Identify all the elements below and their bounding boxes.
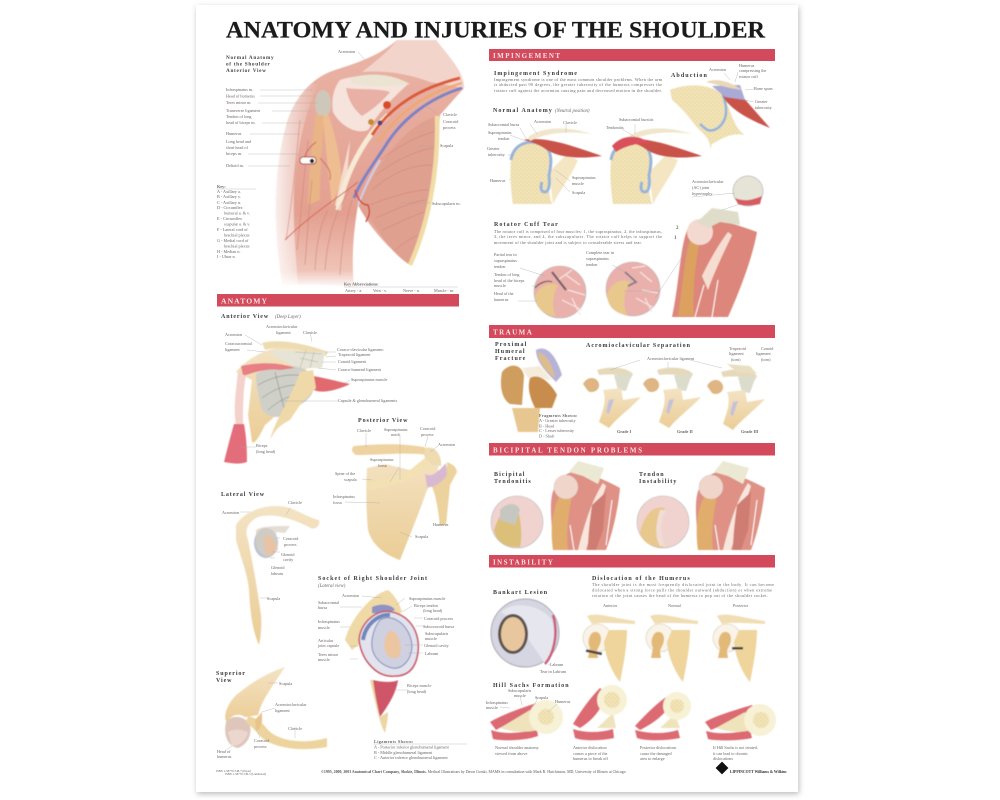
labels: lateral view: Coracoid [283, 536, 299, 541]
labels: normal anatomy: Clavicle [563, 120, 577, 125]
footer credits: ISBN 1-58779-748-7 (Paper) [216, 769, 251, 773]
labels: grades: Trapezoid [729, 346, 747, 351]
panel: tendon instability: Instability [639, 479, 677, 485]
labels: grades: Conoid [761, 346, 774, 351]
labels: normal anatomy: Acromion [534, 119, 552, 124]
labels: posterior view: scapula [344, 477, 357, 482]
labels: main illustration: Infraspinatus m. [226, 87, 253, 92]
labels: normal anatomy: Supraspinatus [572, 175, 596, 180]
panel: normal anatomy: (Neutral position) [555, 109, 590, 114]
labels: rotator cuff: supraspinatus [494, 258, 517, 263]
labels: main illustration: Tendon of long [226, 114, 252, 119]
labels: lateral view [222, 500, 302, 601]
illustration: posterior dislocation [713, 615, 765, 682]
panel: bankart lesion [491, 590, 567, 674]
labels: superior view [217, 681, 307, 759]
labels: socket: muscle [318, 657, 330, 662]
illustration: lateral scapula [236, 506, 319, 645]
panel: dislocation of the humerus: Dislocation of the Humerus [592, 576, 691, 582]
heading band: anatomy [217, 294, 459, 306]
logo [717, 763, 787, 774]
labels: posterior view [333, 426, 456, 539]
key abbreviations: Artery - a. [345, 288, 362, 293]
illustration: shoulder with labelled cuff [672, 176, 763, 317]
labels: anterior deep layer: Acromion [225, 332, 243, 337]
labels: abduction: compressing the [739, 68, 766, 73]
labels: main illustration: Acromion [338, 49, 356, 54]
text: fragments shown: D - Shaft [539, 434, 555, 438]
labels: anterior deep layer: Trapezoid ligament [338, 352, 371, 357]
illustration: tendonitis shoulder [610, 128, 702, 204]
panel: impingement syndrome text: Impingement syndrome is one of the most common shoulder problems. When the arm [494, 77, 663, 82]
captions: hill sachs: dislocations [713, 756, 733, 761]
panel: tendon instability: Tendon [639, 472, 665, 478]
labels: abduction [709, 63, 773, 110]
labels: main illustration: Scapula [440, 143, 453, 148]
panel: rotator cuff tear [494, 176, 763, 318]
labels: socket: Labrum [425, 651, 439, 656]
ligaments shown note: B - Middle glenohumeral ligament [374, 750, 433, 755]
labels: socket: Articular [318, 638, 334, 643]
labels: rotator cuff: Partial tear in [494, 252, 517, 257]
panel: rotator cuff tear: The rotator cuff is comprised of four muscles: 1, the supraspinatus, 2, the infraspinatus, [494, 229, 662, 235]
captions: hill sachs: Normal shoulder anatomy [495, 745, 540, 750]
captions: hill sachs: viewed from above [495, 751, 527, 756]
panel: proximal humeral fracture: Humeral [495, 349, 526, 355]
labels: main illustration: Normal Anatomy [226, 55, 274, 61]
panel: bankart lesion: Bankart Lesion [493, 590, 548, 596]
labels: main illustration: Transverse ligament [226, 108, 261, 113]
labels: anterior deep layer: Supraspinatus muscle [351, 377, 388, 382]
labels: grades: Grade III [741, 429, 759, 434]
panel: abduction [670, 63, 773, 150]
panel: rotator cuff tear: 3, the teres minor, and 4, the subscapularis. The rotator cuff helps to support the [494, 234, 662, 240]
illustration: anterior shoulder muscles [274, 40, 464, 288]
illustration: grades I II III [583, 364, 765, 430]
heading band: impingement: IMPINGEMENT [493, 52, 561, 60]
labels: lateral view: Clavicle [288, 500, 302, 505]
labels: socket: Biceps muscle [407, 683, 431, 688]
heading band: trauma [489, 325, 775, 338]
labels: anterior deep layer: Conoid ligament [338, 359, 367, 364]
panel: rotator cuff tear: Rotator Cuff Tear [494, 222, 559, 228]
key list: B - Axillary v. [217, 194, 241, 199]
labels: grades: ligament [756, 351, 771, 356]
labels: main illustration: of the Shoulder [226, 62, 271, 68]
panel: tendon instability [637, 461, 765, 550]
labels: anterior deep layer: Coraco-humeral ligament [338, 367, 382, 372]
labels: bankart: Labrum [550, 662, 564, 667]
labels: lateral view: labrum [271, 571, 284, 576]
labels: main illustration: Clavicle [443, 112, 457, 117]
labels: grades: Grade II [677, 429, 693, 434]
key list: D - Circumflex [217, 205, 243, 210]
key abbreviations [344, 282, 458, 293]
labels: main illustration: Teres minor m. [226, 100, 251, 105]
panel: dislocation of the humerus: Normal [668, 603, 682, 608]
panel: proximal humeral fracture: Fracture [495, 356, 526, 362]
labels: hill sachs: muscle [486, 705, 498, 710]
heading band: impingement [489, 49, 775, 61]
panel: normal anatomy [487, 108, 702, 204]
labels: main illustration: Coracoid [443, 119, 459, 124]
captions: hill sachs: humerus to break off [573, 756, 609, 761]
illustration: fractured humerus [501, 348, 562, 432]
panel: socket of right shoulder joint: Socket of Right Shoulder Joint [318, 576, 428, 582]
panel: hill sachs formation [486, 683, 776, 761]
footer credits [216, 763, 787, 776]
panel: dislocation of the humerus: rotation of the joint causes the head of the humerus to pop out of the shoulder socket. [592, 593, 768, 598]
panel: lateral view: Lateral View [221, 492, 265, 498]
labels: normal anatomy: tuberosity [488, 152, 506, 157]
labels: main illustration: Humerus [226, 131, 242, 136]
panel: dislocation of the humerus: Anterior [603, 603, 618, 608]
labels: anterior deep layer: (long head) [256, 449, 276, 454]
labels: anterior deep layer: ligament [225, 347, 240, 352]
panel: impingement syndrome text: rotator cuff against the acromion causing pain and decreased motion in the shoulder. [494, 88, 662, 93]
labels: anterior deep layer: Coracoacromial [225, 341, 253, 346]
labels: socket: (long head) [423, 608, 443, 613]
labels: socket: Glenoid cavity [424, 643, 450, 648]
heading band: instability [489, 555, 775, 568]
text: fragments shown: C - Lesser tuberosity [539, 428, 575, 433]
illustration: superior shoulder [225, 667, 327, 749]
captions: hill sachs: cause the damaged [640, 751, 673, 756]
labels: abduction: rotator cuff [739, 74, 758, 79]
labels: lateral view: Acromion [222, 510, 240, 515]
key list: H - Median n. [217, 249, 240, 254]
labels: normal anatomy: Humerus [490, 178, 506, 183]
labels: lateral view: process [284, 542, 297, 547]
key abbreviations: Vein - v. [373, 288, 387, 293]
labels: superior view: Scapula [279, 681, 292, 686]
key list: I - Ulnar n. [217, 254, 236, 259]
labels: abduction: Bone spurs [754, 86, 773, 91]
labels: main illustration [226, 49, 461, 206]
labels: posterior view: Supraspinatus [384, 427, 408, 432]
labels: abduction: Humerus [739, 63, 755, 68]
labels: socket: Subacromial [318, 600, 340, 605]
labels: abduction: Greater [755, 99, 768, 104]
panel: rotator cuff tear: movement of the shoulder joint and is subject to considerable stress and tear. [494, 240, 642, 245]
labels: socket: Subcoracoid bursa [423, 624, 454, 629]
panel: acromioclavicular separation: Acromioclavicular Separation [586, 343, 691, 349]
labels: normal anatomy [487, 117, 654, 195]
ligaments shown note: Ligaments Shown: [374, 739, 414, 744]
labels: rotator cuff: hypertrophy [692, 191, 713, 196]
labels: hill sachs: Infraspinatus [486, 700, 508, 705]
illustration: partial tear circle [534, 266, 586, 318]
illustration: anterior dislocation section [573, 685, 627, 740]
captions: hill sachs: causes a piece of the [573, 751, 608, 756]
labels: anterior deep layer: Coraco-clavicular ligament: [337, 347, 384, 352]
labels: posterior view: Scapula [415, 534, 428, 539]
labels: normal anatomy: Scapula [572, 190, 585, 195]
labels: socket [317, 593, 454, 694]
panel: dislocation of the humerus: Posterior [733, 603, 749, 608]
labels: main illustration: Subscapularis m. [432, 201, 461, 206]
heading band: instability: INSTABILITY [493, 558, 554, 566]
key list: Key: [217, 184, 226, 189]
text: fragments shown: A - Greater tuberosity [539, 418, 577, 423]
labels: abduction: Acromion [709, 67, 727, 72]
labels: normal anatomy: Subacromial bursa [488, 122, 519, 127]
illustration: normal shoulder [510, 128, 602, 204]
panel: superior view: View [216, 678, 232, 684]
illustration: unhealed section [705, 704, 776, 740]
panel: proximal humeral fracture [495, 342, 578, 438]
labels: main illustration: process [443, 125, 456, 130]
labels: socket: (long head) [407, 689, 427, 694]
captions: hill sachs: area to enlarge [640, 756, 665, 761]
labels: lateral view: cavity [283, 557, 294, 562]
captions: hill sachs: Posterior dislocations [640, 745, 677, 750]
labels: anterior deep layer: Capsule & glenohumeral ligaments [338, 398, 398, 403]
labels: main illustration: head of biceps m. [226, 120, 256, 125]
labels: main illustration: Head of humerus [226, 94, 255, 98]
labels: superior view: Clavicle [288, 726, 302, 731]
ligaments shown note: C - Anterior inferior glenohumeral ligament [374, 755, 448, 760]
panel: abduction: Abduction [671, 73, 708, 79]
illustration: anterior dislocation [583, 615, 635, 682]
captions: hill sachs: it can lead to chronic [713, 751, 748, 756]
key list [217, 184, 256, 259]
panel: dislocation of the humerus: dislocated when a strong force pulls the shoulder outward (abduction) or when extreme [592, 588, 772, 592]
labels: posterior view: notch [391, 432, 401, 437]
labels: main illustration: Long head and [226, 139, 252, 144]
key list: C - Axillary n. [217, 200, 241, 205]
labels: grades: (torn) [731, 357, 741, 362]
illustration: posterior scapula [352, 444, 457, 560]
labels: rotator cuff: 2 [676, 226, 679, 231]
panel: impingement syndrome text [494, 71, 663, 93]
panel: impingement syndrome text: Impingement Syndrome [494, 71, 578, 77]
labels: normal anatomy: Supraspinatus [488, 130, 512, 135]
key abbreviations: Muscle - m. [434, 288, 454, 293]
panel: normal anatomy: Normal Anatomy [493, 108, 553, 114]
panel: normal anatomy main illustration [217, 40, 464, 293]
illustration: normal shoulder section [490, 700, 563, 740]
key abbreviations: Key Abbreviations: [344, 282, 379, 286]
panel: socket of right shoulder joint: (Lateral view) [318, 584, 346, 589]
labels: rotator cuff: 1 [674, 236, 677, 241]
footer credits: ISBN 1-58779-749-5 (Laminated) [225, 772, 266, 776]
labels: socket: joint capsule [317, 643, 339, 648]
labels: socket: Coracoid process [424, 616, 453, 621]
key list: A - Axillary a. [217, 189, 241, 194]
labels: rotator cuff: (AC) joint [692, 185, 710, 190]
labels: socket: muscle [318, 625, 330, 630]
heading band: bicipital tendon problems: BICIPITAL TENDON PROBLEMS [493, 446, 644, 454]
panel: bicipital tendonitis: Tendonitis [494, 479, 532, 485]
illustration: glenoid socket [345, 590, 418, 733]
labels: superior view: process [254, 744, 267, 749]
labels: superior view: humerus [217, 754, 232, 759]
labels: posterior view: Supraspinatus [370, 457, 394, 462]
captions: hill sachs: Anterior dislocation [573, 745, 608, 750]
panel: dislocation of the humerus: The shoulder joint is the most frequently dislocated joint in the body. It can become [592, 582, 774, 587]
captions: hill sachs: If Hill Sachs is not treated, [713, 745, 758, 751]
labels: grades: (torn) [761, 357, 771, 362]
key list: brachial plexus [224, 232, 250, 238]
labels: socket: Teres minor [318, 652, 339, 657]
title: ANATOMY AND INJURIES OF THE SHOULDER [226, 18, 766, 44]
key abbreviations: Nerve - n. [403, 288, 420, 293]
ligaments shown note [373, 739, 467, 760]
labels: superior view: Acromioclavicular [275, 702, 307, 707]
labels: rotator cuff: tendon [586, 262, 598, 267]
labels: superior view: Coracoid [254, 738, 270, 743]
labels: lateral view: Glenoid [281, 552, 295, 557]
labels: posterior view: Acromion [438, 442, 456, 447]
labels: rotator cuff: Acromioclavicular [692, 179, 724, 184]
panel: superior view [216, 667, 327, 759]
labels: rotator cuff: Complete tear in [586, 250, 615, 255]
labels: rotator cuff [494, 179, 740, 302]
labels: rotator cuff: Tendon of long [494, 272, 520, 277]
labels: hill sachs: Subscapularis [508, 688, 532, 693]
text: fragments shown: Fragments Shown: [539, 413, 578, 418]
labels: anterior deep layer: Clavicle [303, 330, 317, 335]
illustration: bankart circle [491, 599, 559, 667]
labels: main illustration: biceps m. [226, 151, 242, 156]
labels: hill sachs: Scapula [535, 695, 548, 700]
labels: socket: bursa [318, 605, 327, 610]
labels: posterior view: Clavicle [357, 428, 371, 433]
labels: lateral view: Glenoid [271, 565, 285, 570]
panel: impingement syndrome text: is abducted past 90 degrees, the greater tuberosity of the humerus compresses the [494, 82, 662, 88]
labels: socket: Infraspinatus [318, 619, 340, 624]
labels: hill sachs [486, 688, 571, 712]
panel: posterior view: Posterior View [358, 418, 408, 424]
heading band: anatomy: ANATOMY [221, 296, 268, 306]
ligaments shown note: A - Posterior inferior glenohumeral ligament [374, 744, 450, 750]
labels: bankart [540, 662, 567, 674]
labels: normal anatomy: Tendonitis [606, 125, 624, 130]
illustration: abduction shoulder [670, 80, 770, 150]
heading band: trauma: TRAUMA [493, 328, 533, 336]
labels: anterior deep layer: Acromioclavicular [266, 324, 298, 329]
key list: humeral a. & v. [224, 210, 250, 216]
labels: rotator cuff: head of the biceps [494, 278, 525, 283]
labels: anterior deep layer: ligament [276, 330, 291, 335]
labels: rotator cuff: muscle [494, 283, 506, 288]
illustration: anterior deep layer [224, 341, 350, 464]
labels: socket: Biceps tendon [414, 603, 439, 608]
labels: normal anatomy: Subacromial bursitis [619, 117, 654, 122]
labels: anterior deep layer [225, 324, 398, 454]
illustration: instability shoulder [637, 461, 765, 550]
key list: scapular a. & v. [224, 222, 250, 226]
panel: bicipital tendonitis [491, 461, 620, 550]
key list: brachial plexus [224, 244, 250, 248]
labels: lateral view: Scapula [267, 596, 280, 601]
panel: anterior view deep layer: (Deep Layer) [275, 315, 301, 320]
labels: normal anatomy: tendon [498, 136, 510, 141]
footer credits: ©1995, 2000, 2003 Anatomical Chart Company, Skokie, Illinois. Medical Illustrations by Dawn Gorski, MAMS in consultation with Mark R. Hutchinson, MD, University of Illinois at Chicago [321, 769, 626, 775]
labels: posterior view: process [421, 432, 434, 437]
poster sheet [196, 5, 799, 794]
labels: posterior view: Humerus [433, 522, 449, 527]
panel: bicipital tendonitis: Bicipital [494, 472, 526, 478]
panel: superior view: Superior [216, 671, 246, 677]
labels: posterior view: Coracoid [420, 426, 436, 431]
key list: F - Lateral cord of [217, 227, 248, 232]
labels: grades: Acromioclavicular ligament [647, 356, 695, 361]
labels: anterior deep layer: Biceps [256, 443, 268, 448]
heading band: bicipital tendon problems [489, 443, 775, 456]
labels: socket: muscle [425, 636, 437, 641]
labels: hill sachs: Humerus [555, 699, 571, 704]
labels: main illustration: Anterior View [226, 68, 267, 74]
labels: superior view: ligament [275, 708, 290, 713]
labels: socket: Acromion [342, 593, 360, 598]
labels: normal anatomy: Greater [487, 146, 500, 151]
text: fragments shown [539, 413, 578, 438]
panel: socket of right shoulder joint [317, 576, 454, 733]
labels: grades: ligament [729, 351, 744, 356]
key list: G - Medial cord of [217, 238, 249, 243]
labels: posterior view: Spine of the [335, 471, 355, 476]
labels: rotator cuff: tendon [494, 264, 506, 269]
labels: grades: Grade I [617, 429, 631, 434]
labels: hill sachs: muscle [514, 693, 526, 698]
panel: proximal humeral fracture: Proximal [495, 342, 527, 348]
labels: rotator cuff: humerus [494, 297, 509, 302]
labels: main illustration: Deltoid m. [226, 163, 244, 168]
logo: LIPPINCOTT Williams & Wilkins [730, 770, 787, 774]
illustration: tendonitis shoulder [491, 461, 620, 550]
illustration: complete tear circle [606, 262, 660, 316]
panel: lateral view [221, 492, 319, 645]
captions: hill sachs [495, 745, 758, 761]
panel: dislocation of the humerus [583, 576, 774, 682]
labels: bankart: Tear in Labrum [540, 669, 567, 674]
labels: main illustration: short head of [226, 145, 248, 150]
panel: posterior view [333, 418, 457, 560]
key list: E - Circumflex [217, 216, 243, 221]
labels: posterior view: fossa [378, 463, 387, 468]
labels: socket: Supraspinatus muscle [409, 596, 446, 601]
labels: posterior view: Infraspinatus [333, 494, 355, 499]
labels: grades [610, 346, 774, 434]
illustration: normal position [646, 615, 698, 682]
labels: abduction: tuberosity [755, 105, 773, 110]
labels: socket: Subscapularis [425, 631, 449, 636]
panel: anterior view deep layer [221, 314, 398, 464]
labels: rotator cuff: Head of the [494, 291, 514, 296]
labels: superior view: Head of [217, 749, 231, 754]
panel: hill sachs formation: Hill Sachs Formation [493, 683, 570, 689]
labels: rotator cuff: supraspinatus [586, 256, 609, 261]
labels: normal anatomy: muscle [572, 181, 584, 186]
text: fragments shown: B - Head [539, 424, 555, 428]
panel: acromioclavicular separation [583, 343, 774, 434]
panel: anterior view deep layer: Anterior View [221, 314, 269, 320]
labels: posterior view: fossa [333, 500, 342, 505]
illustration: posterior dislocation section [635, 692, 691, 740]
